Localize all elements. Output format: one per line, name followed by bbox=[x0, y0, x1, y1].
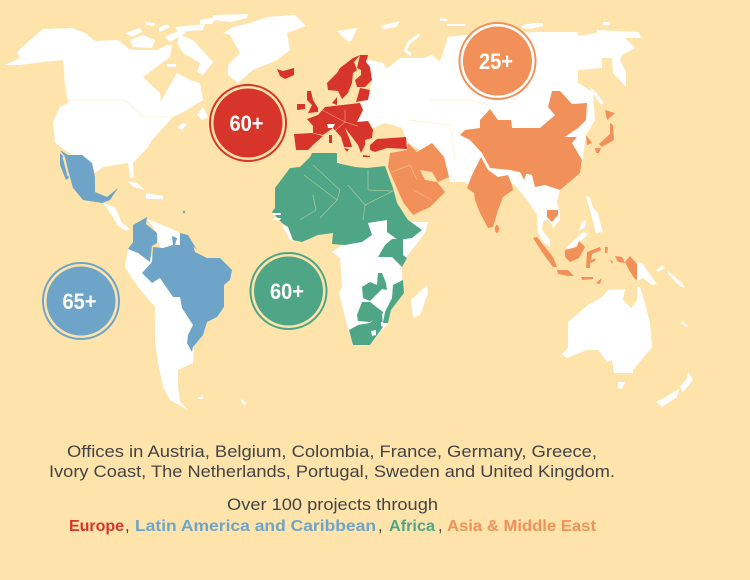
callout: Europe 60+: 60+ bbox=[230, 111, 264, 136]
callout: Europe 60+ bbox=[210, 85, 286, 161]
text block: offices bbox=[49, 443, 615, 481]
region: Europe (red) bbox=[277, 55, 407, 157]
callout: Africa 60+: 60+ bbox=[270, 279, 304, 304]
text block: projects: , bbox=[378, 517, 383, 535]
region: Asia and Middle East (orange) bbox=[388, 91, 637, 284]
Lesotho and Eswatini bbox=[273, 213, 383, 336]
legend: regions: Latin America and Caribbean bbox=[135, 518, 376, 535]
landmass: Eurasia white bbox=[337, 18, 685, 288]
callout: Asia 25+ bbox=[460, 23, 536, 99]
landmass: Greenland bbox=[223, 15, 306, 83]
callout: Africa 60+ bbox=[250, 253, 326, 329]
region: Latin America (blue) bbox=[60, 150, 232, 352]
landmass: North America bbox=[5, 14, 248, 199]
text block: projects: , bbox=[438, 517, 443, 535]
landmass: Malaysian Borneo bbox=[566, 232, 588, 250]
legend: regions: Africa bbox=[389, 518, 435, 535]
legend: regions: Asia & Middle East bbox=[447, 518, 597, 535]
legend: regions: Europe bbox=[69, 518, 124, 535]
legend: regions bbox=[69, 518, 597, 535]
text block: offices: Ivory Coast, The Netherlands, Portugal, Sweden and United Kingdom. bbox=[49, 463, 615, 481]
text block: projects bbox=[125, 496, 443, 535]
landmass: Madagascar and Oceania bbox=[411, 285, 693, 407]
landmass: Central America bbox=[103, 203, 130, 231]
landmass: South America white countries bbox=[125, 219, 246, 410]
callout: Latin America 65+ bbox=[43, 263, 119, 339]
landmass: Papua New Guinea bbox=[637, 262, 657, 285]
world map bbox=[5, 14, 693, 410]
text block: projects: Over 100 projects through bbox=[227, 496, 438, 514]
callout: Latin America 65+: 65+ bbox=[62, 289, 96, 314]
region: Africa (green) bbox=[272, 153, 422, 345]
Switzerland bbox=[327, 124, 335, 128]
inland sea: Black Sea bbox=[375, 124, 395, 137]
text block: projects: , bbox=[125, 517, 130, 535]
landmass: Philippines bbox=[586, 196, 603, 233]
landmass: Africa white countries bbox=[282, 220, 428, 345]
text block: offices: Offices in Austria, Belgium, Colombia, France, Germany, Greece, bbox=[67, 443, 597, 461]
callout: Asia 25+: 25+ bbox=[479, 49, 513, 74]
